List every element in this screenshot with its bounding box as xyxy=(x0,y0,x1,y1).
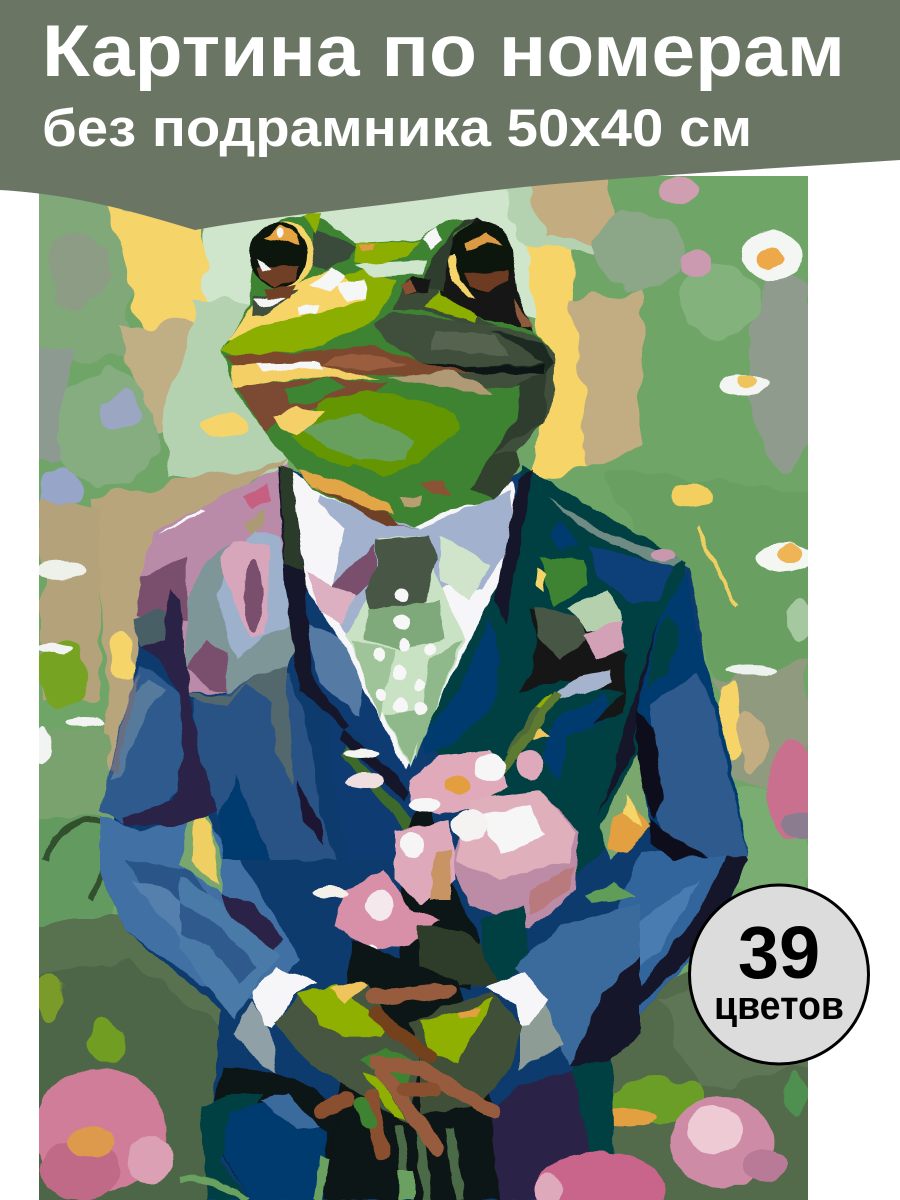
bouquet xyxy=(312,690,636,990)
bottom peony centre xyxy=(534,1152,666,1200)
suit base silhouette xyxy=(100,468,748,1200)
left hand xyxy=(275,985,420,1123)
mouth xyxy=(223,345,477,375)
bottom peony right xyxy=(670,1096,774,1188)
head base xyxy=(220,213,555,527)
gap between left arm and torso xyxy=(179,816,223,894)
frog head xyxy=(220,213,555,528)
painting: frog in a suit xyxy=(39,176,808,1200)
cuffs and hands xyxy=(180,877,640,1200)
fingers xyxy=(322,991,493,1153)
right hand xyxy=(410,992,522,1113)
left torso and sleeve xyxy=(98,463,362,862)
cuffs xyxy=(233,1000,277,1073)
throat xyxy=(235,377,387,433)
badge: 39 colours xyxy=(690,885,868,1064)
top banner xyxy=(0,0,900,230)
left forearm xyxy=(100,815,300,1000)
badge: 39 colours: цветов xyxy=(714,984,844,1028)
suit xyxy=(100,463,748,1200)
left eye xyxy=(280,221,314,287)
shirt and tie xyxy=(288,470,520,770)
subtitle: без подрамника 50х40 см xyxy=(42,99,752,158)
dark right cheek xyxy=(373,312,555,453)
painting background: meadow xyxy=(39,176,808,1200)
head olive highlights xyxy=(220,270,397,357)
lapel seams and boutonniere xyxy=(278,465,627,800)
right torso and sleeve xyxy=(420,467,748,877)
wildflowers in the background xyxy=(34,176,818,1200)
title: Картина по номерам xyxy=(42,11,845,92)
badge: 39 colours: 39 xyxy=(738,911,820,994)
right forearm xyxy=(618,850,748,1014)
tie dots xyxy=(374,588,436,714)
right eye xyxy=(440,217,533,330)
bottom peony left xyxy=(34,1068,166,1192)
stems xyxy=(400,1127,460,1200)
